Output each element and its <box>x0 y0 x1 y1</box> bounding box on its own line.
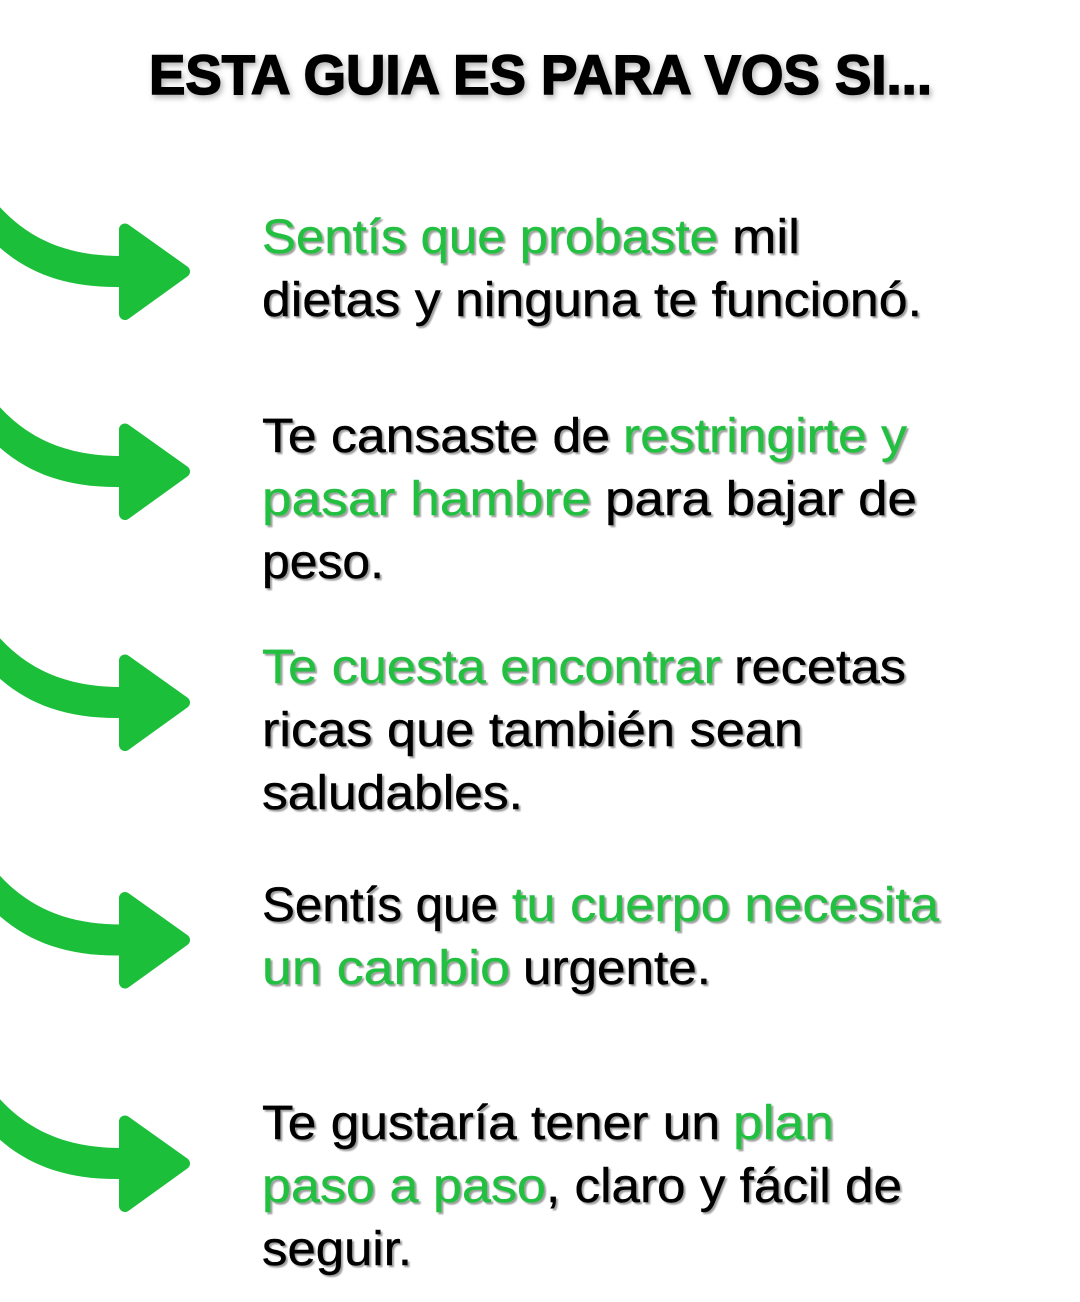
arrow 4 <box>0 874 184 982</box>
text block 4: Sentís que <box>262 879 498 932</box>
text block 2: restringirte y <box>623 410 907 463</box>
text block 5: plan <box>733 1097 834 1150</box>
arrow 1 <box>0 205 184 314</box>
text block 3 <box>262 641 906 820</box>
text block 2: Te cansaste de <box>262 410 610 463</box>
text block 5: Te gustaría tener un <box>262 1097 720 1150</box>
text block 4 <box>262 879 939 995</box>
arrow 5 <box>0 1097 184 1206</box>
text block 2: peso. <box>262 536 384 589</box>
text block 4: urgente. <box>523 942 711 995</box>
text block 4: un cambio <box>262 942 510 995</box>
text block 2: pasar hambre <box>262 473 591 526</box>
text block 3: ricas que también sean <box>262 704 803 757</box>
title: ESTA GUIA ES PARA VOS SI... <box>149 43 932 106</box>
text block 3: Te cuesta encontrar <box>262 641 721 694</box>
text block 3: saludables. <box>262 767 523 820</box>
text block 5: paso a paso <box>262 1160 546 1213</box>
text block 2 <box>262 410 917 589</box>
text block 1 <box>262 211 922 327</box>
text block 5: seguir. <box>262 1223 412 1276</box>
text block 4: tu cuerpo necesita <box>512 879 939 932</box>
text block 3: recetas <box>734 641 906 694</box>
text block 1: mil <box>732 211 800 264</box>
text block 1: Sentís que probaste <box>262 211 718 264</box>
text block 2: para bajar de <box>605 473 917 526</box>
text block 5: , claro y fácil de <box>546 1160 902 1213</box>
text block 5 <box>262 1097 902 1276</box>
arrow 3 <box>0 636 184 745</box>
text block 1: dietas y ninguna te funcionó. <box>262 274 922 327</box>
arrow 2 <box>0 405 184 514</box>
